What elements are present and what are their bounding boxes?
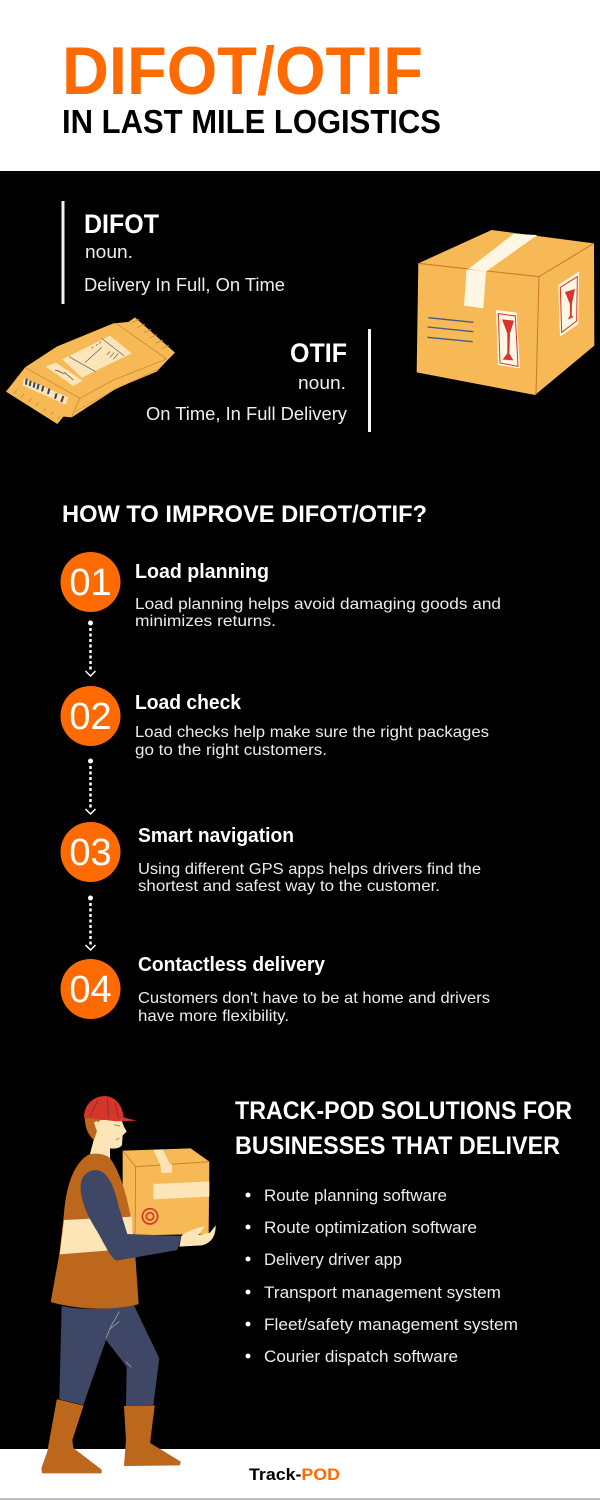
hand <box>179 1225 216 1247</box>
step 01: Load planning helps avoid damaging goods and <box>135 596 501 613</box>
heading: how to improve: HOW TO IMPROVE DIFOT/OTIF? <box>62 501 427 528</box>
step 03: shortest and safest way to the customer. <box>138 878 440 895</box>
step 01 <box>60 552 501 630</box>
step 01: 01 <box>69 562 112 604</box>
solutions heading: BUSINESSES THAT DELIVER <box>235 1132 560 1160</box>
step 04: 04 <box>69 969 112 1011</box>
subtitle: IN LAST MILE LOGISTICS <box>62 103 441 140</box>
step 02: go to the right customers. <box>135 742 327 759</box>
step 04 <box>60 954 490 1025</box>
neck and face <box>90 1119 127 1158</box>
definition: OTIF: On Time, In Full Delivery <box>146 404 347 424</box>
trousers <box>59 1305 159 1406</box>
solutions heading: TRACK-POD SOLUTIONS FOR <box>235 1097 572 1125</box>
solutions list: Route planning software <box>264 1186 447 1205</box>
definition: OTIF: OTIF <box>290 338 347 368</box>
step 01: Load planning <box>135 561 269 583</box>
definition: DIFOT: Delivery In Full, On Time <box>84 275 285 295</box>
step 04: have more flexibility. <box>138 1008 289 1025</box>
solutions heading <box>235 1097 572 1160</box>
solutions list: Fleet/safety management system <box>264 1315 518 1334</box>
step 04: Contactless delivery <box>138 954 326 976</box>
step 03 <box>60 822 481 895</box>
solutions list: Transport management system <box>264 1283 501 1302</box>
illustration: delivery man carrying a box <box>42 1096 216 1473</box>
step 03: 03 <box>69 832 112 874</box>
definition: DIFOT: noun. <box>85 242 133 262</box>
boots <box>42 1400 101 1473</box>
definition: OTIF: noun. <box>298 373 346 393</box>
definition: OTIF <box>146 329 371 432</box>
definition: DIFOT <box>62 201 285 304</box>
definition: DIFOT: DIFOT <box>84 209 159 239</box>
solutions list: Courier dispatch software <box>264 1347 458 1366</box>
ear <box>94 1121 100 1131</box>
sleeve <box>81 1170 181 1261</box>
title: DIFOT/OTIF <box>62 33 423 109</box>
step 01: minimizes returns. <box>135 613 276 630</box>
footer band <box>0 1449 600 1500</box>
cap <box>84 1096 137 1121</box>
step 03: Smart navigation <box>138 825 294 847</box>
arrow: 02 to 03 <box>86 758 96 814</box>
icon: mailer parcel <box>6 317 175 424</box>
step 02: Load check <box>135 692 242 714</box>
step 02: Load checks help make sure the right packages <box>135 724 489 741</box>
arrow: 01 to 02 <box>86 620 96 676</box>
icon: cardboard box <box>417 230 594 395</box>
step 03: Using different GPS apps helps drivers find the <box>138 861 481 878</box>
brand wordmark: Track-POD <box>249 1465 340 1484</box>
vest <box>51 1154 139 1309</box>
step 02: 02 <box>69 696 112 738</box>
step 04: Customers don't have to be at home and drivers <box>138 990 490 1007</box>
header band <box>0 0 600 171</box>
step 02 <box>60 686 489 759</box>
solutions list: Delivery driver app <box>264 1250 402 1269</box>
solutions list <box>246 1186 518 1366</box>
box <box>123 1148 209 1235</box>
arrow: 03 to 04 <box>86 896 96 950</box>
solutions list: Route optimization software <box>264 1218 477 1237</box>
